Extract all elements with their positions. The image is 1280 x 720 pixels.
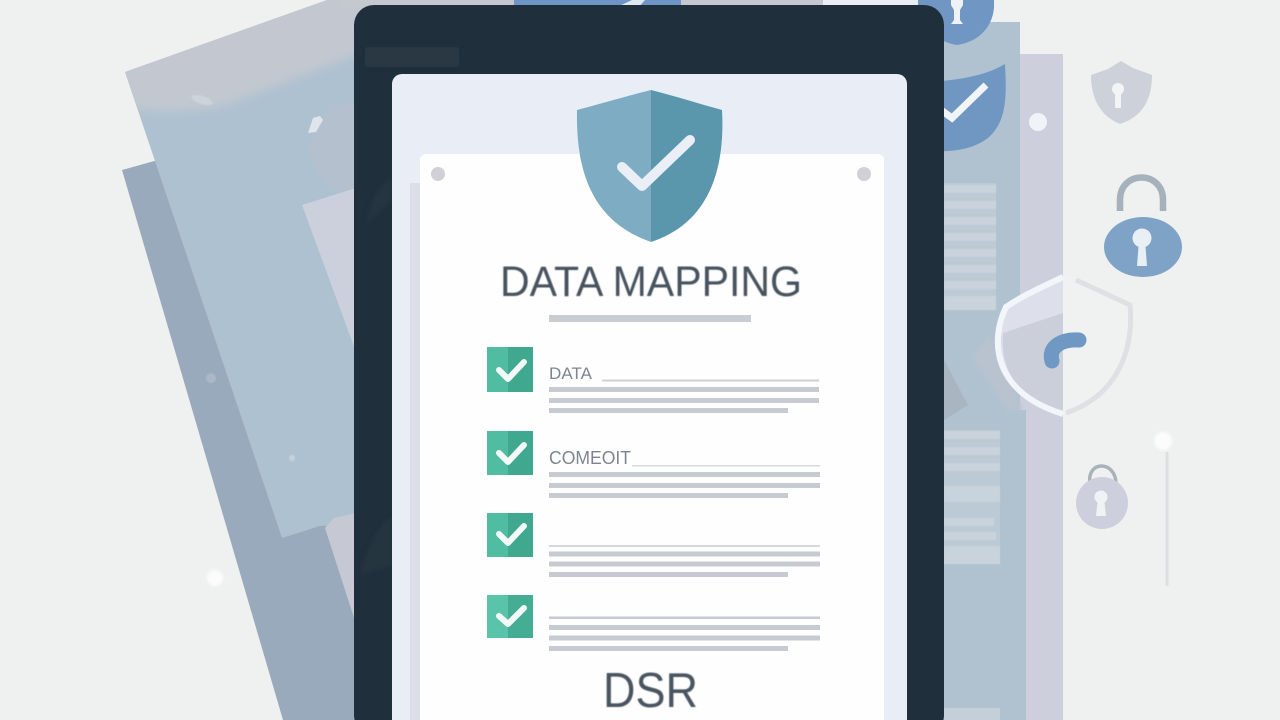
text lines xyxy=(549,380,819,413)
right half fill xyxy=(1063,276,1131,413)
paper hole left xyxy=(431,167,445,181)
lilac inset sheet lower xyxy=(325,513,356,624)
icon: blue padlock xyxy=(1104,178,1182,277)
shield left half xyxy=(577,90,651,242)
lock body xyxy=(1076,477,1128,529)
keyhole xyxy=(1132,228,1152,248)
icon: small grey padlock xyxy=(1076,466,1128,529)
white dot on lilac sheet xyxy=(1029,113,1047,131)
keyhole xyxy=(951,0,963,24)
checklist row 1 xyxy=(487,347,819,413)
checklist row 2 xyxy=(487,431,820,498)
blue strip at top xyxy=(514,0,681,8)
keyhole xyxy=(1094,490,1108,504)
faint circle on sheet xyxy=(310,103,400,193)
left half lower tone xyxy=(1003,313,1063,411)
small dots on sheets xyxy=(206,373,295,461)
shield right half xyxy=(651,90,722,242)
shadow behind shield xyxy=(972,337,1023,410)
text lines xyxy=(549,465,820,498)
text lines xyxy=(549,616,820,651)
faint bezel circle upper xyxy=(366,177,392,225)
faint bezel circle xyxy=(360,517,392,575)
panel: stacked documents left xyxy=(122,0,364,720)
icon: blue shield with check xyxy=(930,64,1006,151)
decorative pin xyxy=(1154,432,1172,586)
panel: stacked documents right xyxy=(340,0,1063,720)
checkbox xyxy=(487,347,533,392)
bottom stripe fragment xyxy=(944,708,1000,720)
keyhole xyxy=(1112,83,1124,95)
left half fill xyxy=(1000,276,1063,415)
right half outline xyxy=(1066,280,1131,413)
tablet screen xyxy=(392,74,907,720)
label: COMEOIT xyxy=(549,448,631,468)
floating dot left xyxy=(207,570,223,586)
text stripes upper xyxy=(944,183,996,310)
text stripes lower xyxy=(944,430,1000,564)
white notch in blue strip xyxy=(615,0,645,8)
paper shadow xyxy=(410,183,422,720)
label: DATA xyxy=(549,364,593,383)
white paper card xyxy=(420,154,884,720)
checklist row 3 xyxy=(487,513,820,577)
title: DATA MAPPING xyxy=(500,258,802,306)
tall lilac sheet xyxy=(1020,54,1063,720)
pin head xyxy=(1154,432,1172,450)
highlight on circle xyxy=(308,116,323,133)
light strip at top xyxy=(340,0,930,8)
checkbox xyxy=(487,431,533,475)
icon: main shield with check xyxy=(577,90,722,242)
left half outline xyxy=(998,277,1063,414)
front document sheet xyxy=(125,0,370,538)
icon: large outline shield xyxy=(972,276,1131,415)
grey shape behind tablet xyxy=(944,360,968,420)
icon: blue keyhole shield top xyxy=(918,0,994,45)
checkbox xyxy=(487,513,533,557)
tablet frame xyxy=(354,5,944,720)
lock body xyxy=(1104,217,1182,277)
footer label: DSR xyxy=(603,664,698,718)
bezel bar xyxy=(365,47,459,67)
highlight streak xyxy=(190,93,214,107)
title underline xyxy=(549,315,751,322)
icon: pale shield with keyhole xyxy=(1091,61,1152,124)
check mark xyxy=(941,85,986,118)
checkbox xyxy=(487,595,533,638)
top shaded band of front sheet xyxy=(110,0,375,111)
checklist row 4 xyxy=(487,595,820,651)
lilac inset sheet upper xyxy=(302,188,356,352)
check mark xyxy=(622,140,690,186)
lower strip of blue-grey sheet xyxy=(1020,410,1026,720)
paper hole right xyxy=(857,167,871,181)
back document sheet xyxy=(122,158,370,720)
blue arc xyxy=(1051,340,1079,361)
pale strip at top xyxy=(823,0,928,8)
text lines xyxy=(549,545,820,577)
tall blue-grey sheet xyxy=(930,22,1020,720)
